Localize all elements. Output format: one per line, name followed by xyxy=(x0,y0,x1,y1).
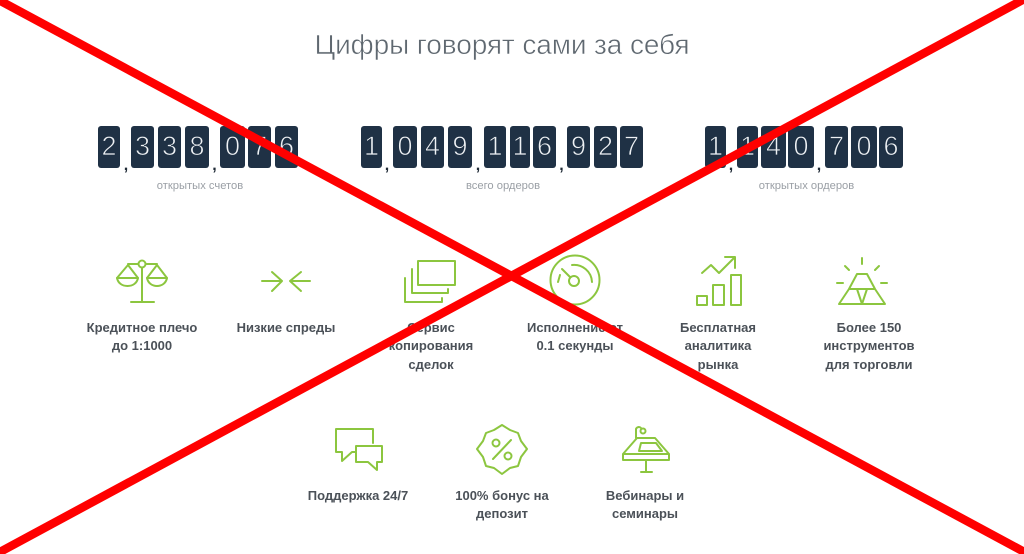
counter: accounts opened: 0 xyxy=(225,131,240,161)
counter: total orders: 1 xyxy=(487,131,503,161)
counter: total orders: 2 xyxy=(598,131,613,161)
label: execution: 0.1 секунды xyxy=(536,338,614,353)
counter: accounts opened: 3 xyxy=(135,131,150,161)
caption: total orders: всего ордеров xyxy=(466,180,540,192)
counter: open orders: 0 xyxy=(856,131,872,161)
counter: total orders: 1 xyxy=(512,131,528,161)
counter: total orders xyxy=(361,126,643,174)
icon: scales xyxy=(117,260,167,302)
label: analytics: Бесплатная xyxy=(680,320,756,335)
counter: accounts opened: , xyxy=(212,157,217,174)
icon: chat bubbles xyxy=(336,429,382,470)
label: leverage: до 1:1000 xyxy=(112,338,172,353)
label: leverage: Кредитное плечо xyxy=(87,320,197,335)
counter: total orders: 6 xyxy=(537,131,552,161)
label: instruments: Более 150 xyxy=(837,320,901,335)
counter: open orders: 1 xyxy=(740,131,755,161)
label: analytics: рынка xyxy=(698,357,739,372)
counter: accounts opened: 8 xyxy=(189,131,205,161)
label: webinars: семинары xyxy=(612,506,678,521)
icon: speedometer xyxy=(550,256,600,304)
counter: open orders: , xyxy=(729,157,733,174)
label: analytics: аналитика xyxy=(685,338,752,353)
counter: total orders: 4 xyxy=(425,131,440,161)
counter: total orders: 0 xyxy=(397,131,413,161)
counter: open orders: , xyxy=(817,157,821,174)
icon: growth chart xyxy=(697,257,741,305)
label: bonus: депозит xyxy=(476,506,528,521)
counter: accounts opened xyxy=(98,126,298,174)
counter: open orders: 7 xyxy=(829,131,844,161)
counter: accounts opened: 6 xyxy=(279,131,294,161)
label: copy trading: копирования xyxy=(389,338,473,353)
counter: accounts opened: 3 xyxy=(162,131,177,161)
label: support: Поддержка 24/7 xyxy=(308,488,408,503)
label: instruments: для торговли xyxy=(825,357,913,372)
counter: open orders xyxy=(705,126,903,174)
counter: total orders: 9 xyxy=(571,131,586,161)
counter: open orders: 6 xyxy=(883,131,899,161)
counter: total orders: , xyxy=(559,157,564,174)
label: spreads: Низкие спреды xyxy=(237,320,335,335)
counter: accounts opened: , xyxy=(124,157,128,174)
icon: webinar lectern xyxy=(623,427,669,472)
icon: gold bars xyxy=(837,258,887,304)
label: execution: Исполнение от xyxy=(527,320,623,335)
label: bonus: 100% бонус на xyxy=(455,488,549,503)
counter: total orders: 9 xyxy=(452,131,468,161)
counter: total orders: , xyxy=(385,157,389,174)
title: Цифры говорят сами за себя xyxy=(314,29,690,60)
label: instruments: инструментов xyxy=(823,338,915,353)
label: webinars: Вебинары и xyxy=(606,488,684,503)
icon: copy windows xyxy=(405,261,455,302)
icon: arrows xyxy=(262,272,310,291)
counter: open orders: 1 xyxy=(708,131,723,161)
counter: total orders: 1 xyxy=(364,131,379,161)
counter: open orders: 0 xyxy=(793,131,809,161)
caption: accounts: открытых счетов xyxy=(157,180,243,192)
caption: open orders: открытых ордеров xyxy=(759,180,854,192)
counter: total orders: 7 xyxy=(624,131,639,161)
icon: percent badge xyxy=(477,425,527,474)
label: copy trading: сделок xyxy=(408,357,454,372)
counter: accounts opened: 7 xyxy=(252,131,267,161)
counter: open orders: 4 xyxy=(766,131,781,161)
counter: accounts opened: 2 xyxy=(101,131,117,161)
counter: total orders: , xyxy=(476,157,480,174)
label: copy trading: Сервис xyxy=(407,320,455,335)
